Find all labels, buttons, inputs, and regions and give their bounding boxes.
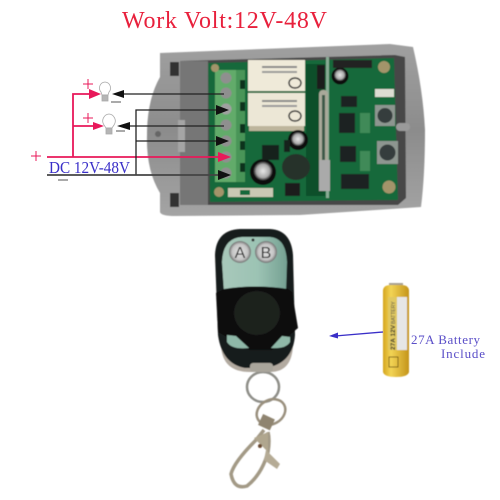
supply negative wire	[47, 174, 222, 176]
button B	[255, 241, 277, 263]
circuit board	[208, 58, 398, 202]
wiring diagram	[31, 79, 231, 180]
mounting screws	[211, 61, 396, 197]
metal loop	[250, 363, 273, 372]
lower teal windows	[227, 335, 249, 348]
capacitors and coil	[228, 68, 348, 197]
battery pointer arrow	[329, 332, 383, 338]
lamp 2	[103, 114, 115, 134]
battery terminal	[389, 283, 403, 287]
terminal block	[215, 70, 245, 182]
black negative wires	[120, 94, 224, 175]
push buttons	[375, 89, 398, 164]
battery	[383, 283, 409, 377]
remote control key fob	[215, 229, 298, 487]
title: Work Volt:12V-48V	[122, 8, 328, 34]
battery caption: Include	[441, 346, 485, 361]
battery caption: 27A Battery	[411, 332, 480, 347]
red positive wires	[47, 94, 222, 157]
fob body	[215, 229, 295, 368]
battery gold body	[383, 285, 409, 377]
receiver module	[147, 44, 425, 216]
case shell	[147, 44, 425, 216]
case inner tray	[180, 55, 406, 205]
button A: A	[235, 245, 246, 262]
relays	[248, 60, 305, 131]
antenna and crystal	[306, 57, 330, 198]
battery recycling mark	[389, 357, 398, 367]
chips	[333, 60, 372, 189]
battery silver label: BATTERY	[391, 301, 397, 324]
battery silver label: 27A 12V	[390, 324, 397, 350]
indicator light	[252, 238, 254, 242]
arrowheads	[89, 89, 231, 180]
button A	[229, 241, 251, 263]
button B: B	[261, 245, 271, 262]
key ring and clasp	[231, 372, 290, 487]
teal panel	[222, 237, 287, 292]
supply voltage label: DC 12V-48V	[49, 158, 130, 177]
battery silver label	[388, 297, 407, 350]
case clip and slot details	[170, 62, 179, 76]
fob back edge	[221, 345, 293, 372]
lamp and supply minus marks	[58, 102, 125, 180]
sliding cover	[216, 286, 298, 350]
plus and minus signs	[31, 79, 93, 161]
lamp 1	[99, 82, 111, 101]
battery caption	[411, 332, 485, 361]
